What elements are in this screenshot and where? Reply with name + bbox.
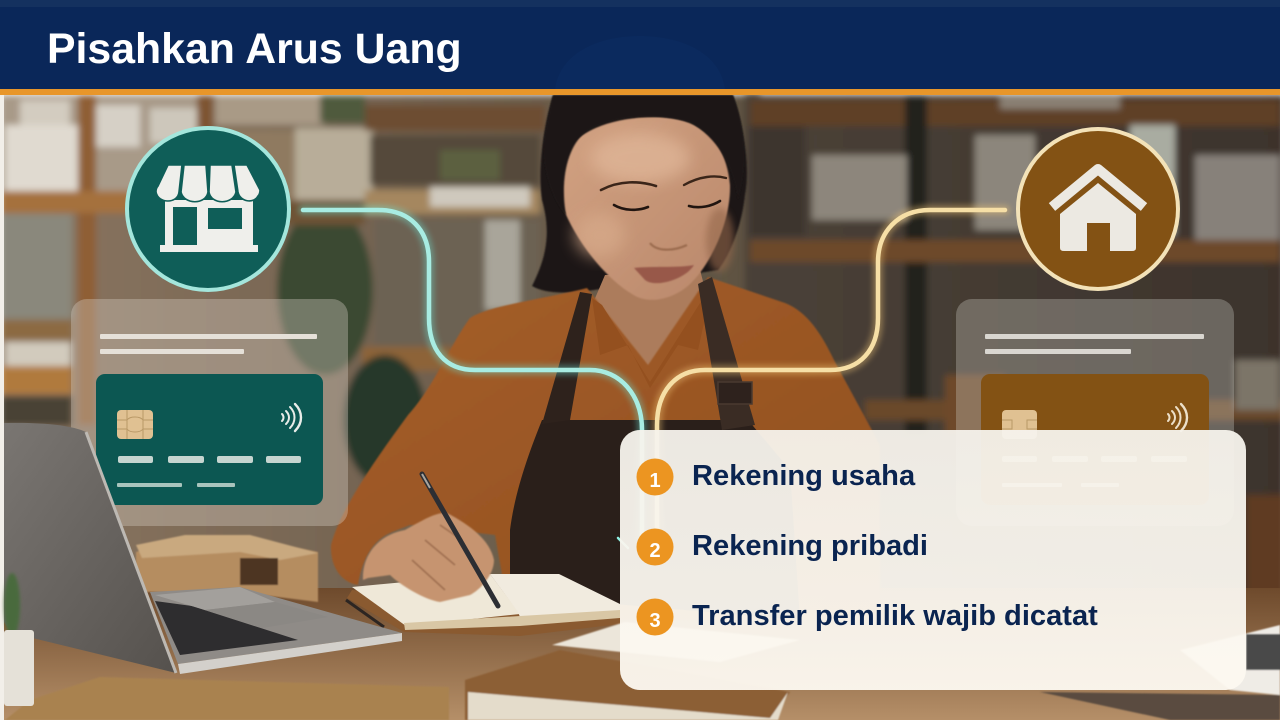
card chip — [117, 410, 153, 439]
table — [0, 588, 1280, 720]
home icon badge — [1018, 129, 1178, 289]
card number groups — [1002, 456, 1187, 462]
card chip — [1002, 410, 1037, 439]
glass panel: business account — [71, 299, 348, 526]
left white margin — [0, 95, 4, 720]
gold money flow line — [657, 210, 1005, 545]
right shelves, blurred — [745, 95, 1280, 620]
item 1 — [636, 458, 916, 496]
front edge — [178, 633, 402, 674]
number badge 3 — [636, 598, 674, 636]
icon: house — [1052, 169, 1144, 251]
apron strap left — [542, 292, 592, 424]
brows — [601, 176, 726, 190]
text placeholder lines — [985, 334, 1204, 354]
hand writing — [363, 513, 494, 602]
notebook — [346, 574, 620, 636]
contactless symbol — [282, 404, 301, 431]
panel: list of rules — [620, 430, 1246, 690]
left shelves, blurred — [0, 95, 760, 620]
apron strap right — [698, 277, 755, 430]
item 3: Transfer pemilik wajib dicatat — [692, 600, 1098, 632]
strap buckle — [718, 382, 752, 404]
mouth — [634, 265, 694, 283]
collar — [592, 298, 704, 385]
laptop — [4, 423, 402, 674]
icon: storefront — [156, 165, 260, 252]
glass panel: personal account — [956, 299, 1234, 526]
neck — [595, 271, 703, 366]
apron body — [510, 420, 756, 604]
eyes — [614, 201, 720, 210]
keyboard — [155, 601, 298, 655]
card name lines — [117, 483, 235, 487]
teal money flow line — [303, 210, 642, 548]
woman — [331, 95, 880, 620]
number badge 2: 2 — [649, 540, 661, 562]
face — [560, 117, 730, 300]
pen — [422, 474, 498, 606]
heading: Pisahkan Arus Uang — [47, 25, 462, 73]
nose — [650, 243, 687, 250]
title bar — [0, 0, 1280, 89]
cardboard box — [136, 535, 318, 602]
brown bank card — [981, 374, 1209, 505]
contactless symbol — [1168, 404, 1187, 431]
calculator and papers, right edge — [1040, 625, 1280, 720]
text placeholder lines — [100, 334, 317, 354]
upper deck — [155, 587, 275, 610]
item 1: Rekening usaha — [692, 460, 916, 492]
shirt — [330, 276, 873, 586]
number badge 1: 1 — [649, 470, 661, 492]
number badge 1 — [636, 458, 674, 496]
number badge 2 — [636, 528, 674, 566]
card number groups — [118, 456, 301, 463]
store icon badge — [127, 128, 289, 290]
hair behind — [532, 95, 747, 293]
hair front — [544, 96, 744, 215]
card name lines — [1002, 483, 1119, 487]
books on table — [5, 622, 800, 720]
teal bank card — [96, 374, 323, 505]
item 2: Rekening pribadi — [692, 530, 928, 562]
number badge 3: 3 — [649, 610, 661, 632]
plant pot — [4, 573, 34, 706]
orange accent line — [0, 89, 1280, 95]
